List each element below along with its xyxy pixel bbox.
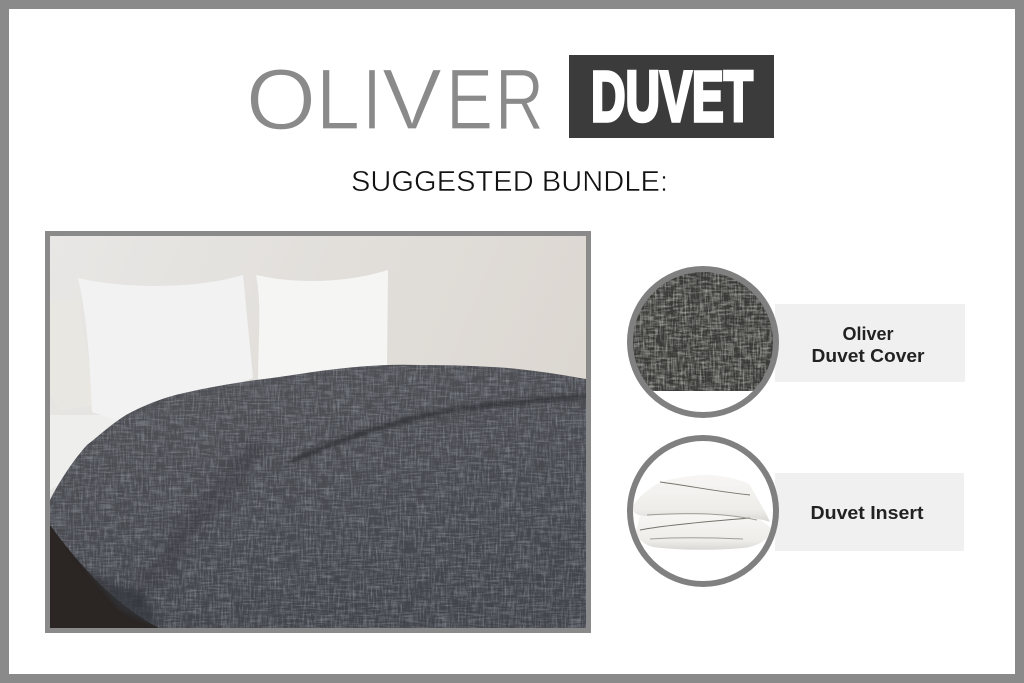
label: Oliver Duvet Cover: Oliver: [842, 324, 894, 344]
panel: bed photo: [48, 234, 591, 630]
shadow under lobe: [88, 570, 159, 627]
title: OLIVER: R: [495, 52, 544, 148]
title: OLIVER: E: [446, 52, 493, 148]
pillow left: [78, 275, 253, 425]
icon: duvet insert circle: [630, 438, 776, 584]
title: OLIVER: L: [316, 52, 360, 148]
floor: [50, 525, 159, 628]
wall: [50, 236, 586, 500]
back pillow: [50, 300, 96, 410]
folded insert upper: [632, 475, 770, 522]
pillow right: [256, 270, 388, 382]
title badge: DUVET: [569, 55, 774, 138]
label: Oliver Duvet Cover: Duvet Cover: [812, 346, 924, 366]
title: OLIVER: I: [362, 52, 382, 148]
sheet: [50, 415, 117, 490]
folded insert lower: [636, 513, 772, 550]
label: Oliver Duvet Cover: [775, 304, 965, 382]
icon: fabric swatch circle: [625, 262, 781, 415]
duvet body: [50, 365, 591, 628]
title: OLIVER: O: [246, 52, 316, 148]
title badge: DUVET: DUVET: [591, 58, 753, 137]
title: OLIVER: V: [382, 52, 442, 148]
label: Duvet Insert: Duvet Insert: [810, 503, 924, 523]
duvet drape edge: [141, 442, 256, 588]
label: Duvet Insert: [775, 473, 964, 551]
duvet fold shadow: [290, 396, 591, 462]
title: OLIVER: [246, 52, 544, 148]
subtitle: SUGGESTED BUNDLE:: [351, 166, 668, 198]
